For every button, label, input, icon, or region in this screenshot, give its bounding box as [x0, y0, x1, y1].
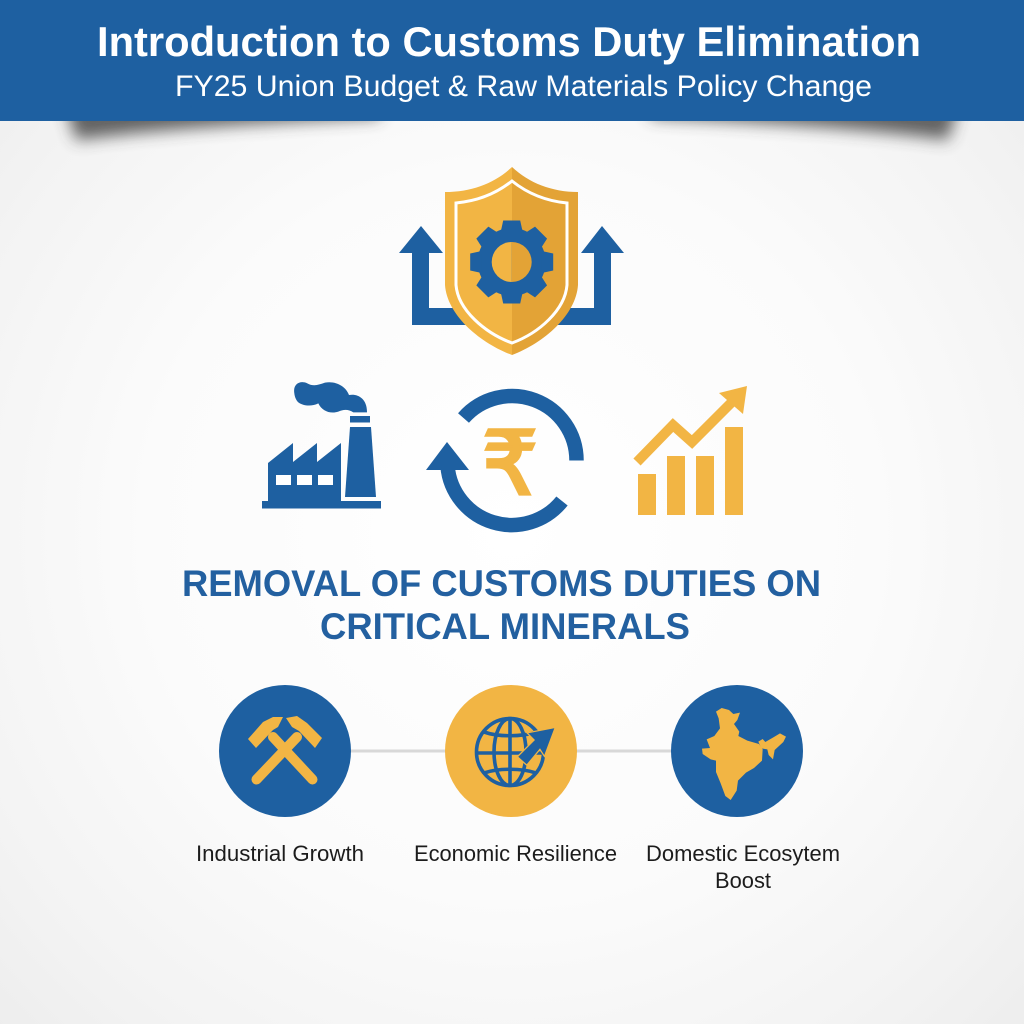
main heading: [182, 563, 821, 647]
icon: map of India: [671, 685, 803, 817]
subtitle: FY25 Union Budget & Raw Materials Policy Change: [175, 70, 872, 103]
main heading: REMOVAL OF CUSTOMS DUTIES ON: [182, 563, 821, 604]
icon: rising bar chart: [637, 386, 747, 515]
main heading: CRITICAL MINERALS: [320, 606, 690, 647]
icon: globe with arrow: [445, 685, 577, 817]
label: Boost: [715, 868, 771, 893]
label: [646, 841, 840, 893]
connector line: [345, 750, 680, 752]
icon: gear: [470, 220, 553, 304]
benefit: economic resilience: [414, 685, 617, 866]
icon: rupee cycle: [426, 396, 576, 525]
icon: right up arrow: [553, 226, 624, 325]
label: Industrial Growth: [196, 841, 364, 866]
icon: left up arrow: [399, 226, 470, 325]
header banner: [0, 0, 1024, 121]
rupee symbol: ₹: [482, 414, 538, 513]
label: Economic Resilience: [414, 841, 617, 866]
header shadow: [64, 100, 960, 140]
label: Domestic Ecosytem: [646, 841, 840, 866]
icon: factory: [262, 382, 381, 508]
benefit: industrial growth: [196, 685, 364, 866]
icon: shield with gear and up arrows: [399, 167, 624, 355]
title: Introduction to Customs Duty Elimination: [97, 18, 921, 65]
benefit: domestic ecosystem boost: [646, 685, 840, 893]
icon: crossed hammers: [219, 685, 351, 817]
icon: shield: [445, 167, 578, 355]
